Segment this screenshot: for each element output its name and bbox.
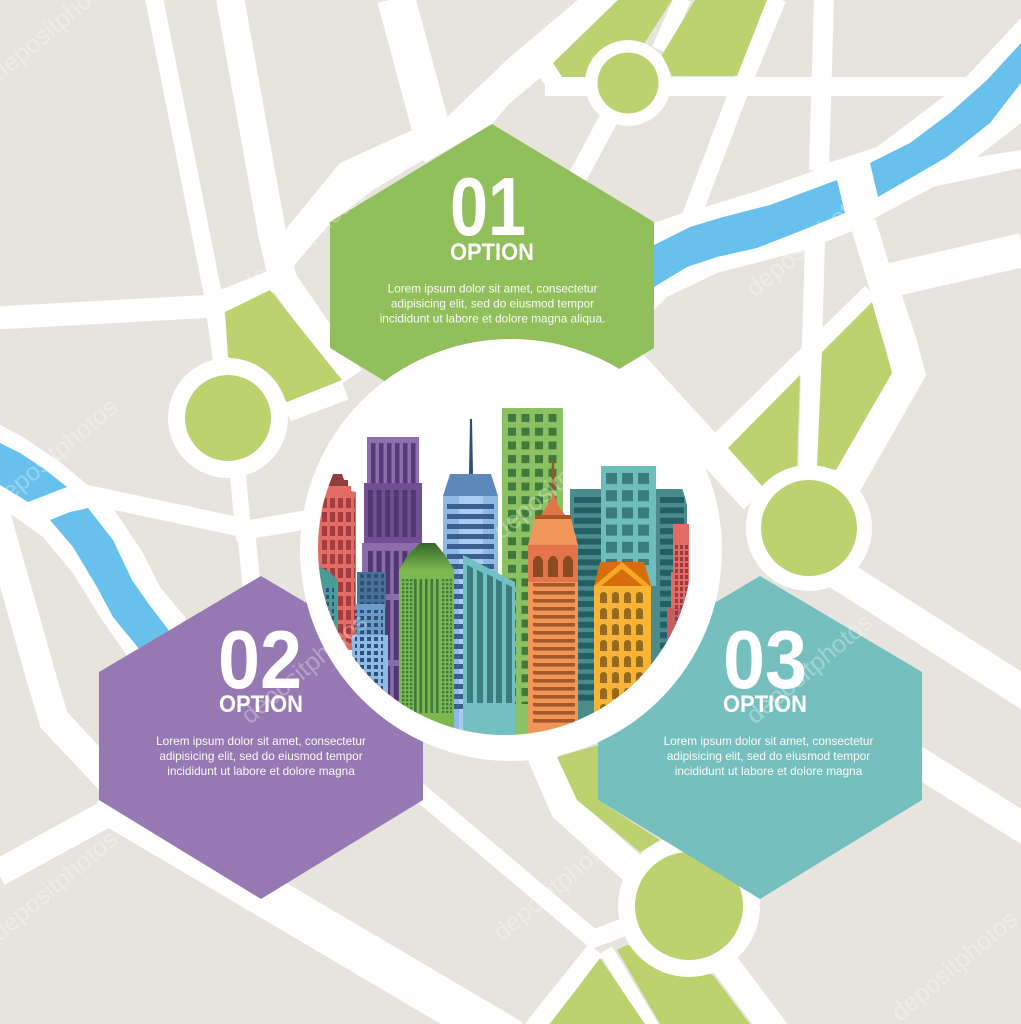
label option: OPTION — [723, 691, 807, 718]
illustration: city skyline — [318, 408, 689, 738]
building: teal group — [570, 466, 687, 729]
building: small blue — [352, 572, 388, 705]
watermarks: depositphotos — [236, 608, 373, 730]
parks — [225, 0, 892, 1024]
description: adipisicing elit, sed do eiusmod tempor — [667, 749, 870, 763]
description: adipisicing elit, sed do eiusmod tempor — [391, 296, 594, 310]
building: red left — [318, 474, 356, 650]
river banks: left — [0, 425, 185, 670]
central white circle — [300, 339, 722, 761]
description — [156, 734, 366, 778]
panel: option 03 hexagon — [598, 576, 922, 899]
roundabouts — [168, 40, 872, 977]
watermarks: depositphotos — [741, 608, 878, 730]
label option: OPTION — [219, 691, 303, 718]
river: upper right — [654, 43, 1021, 287]
building: teal small left — [318, 566, 337, 630]
map block beside river — [977, 123, 1021, 157]
panel: option 01 hexagon — [330, 124, 654, 446]
text: option 03 — [664, 613, 873, 778]
watermarks: depositphotos — [488, 423, 625, 545]
map sliver beside hexagon — [373, 160, 430, 205]
building: red right — [667, 524, 689, 648]
description: adipisicing elit, sed do eiusmod tempor — [159, 749, 363, 763]
building: teal glass front — [463, 555, 515, 738]
building: purple — [362, 437, 422, 708]
description — [380, 282, 605, 326]
description: Lorem ipsum dolor sit amet, consectetur — [156, 734, 366, 748]
number 01: 01 — [450, 160, 526, 253]
description: incididunt ut labore et dolore magna aliqua. — [380, 312, 605, 326]
text: option 01 — [380, 160, 605, 326]
watermarks: depositphotos — [488, 825, 625, 947]
text: option 02 — [156, 613, 366, 778]
number 03: 03 — [723, 613, 807, 706]
watermarks: depositphotos — [741, 181, 878, 303]
description: incididunt ut labore et dolore magna — [675, 764, 863, 778]
panel: option 02 hexagon — [99, 576, 423, 899]
building: yellow — [594, 562, 651, 712]
label option: OPTION — [450, 239, 534, 266]
river banks: upper right — [654, 18, 1021, 310]
river: left — [0, 443, 170, 650]
description — [664, 734, 873, 778]
description: Lorem ipsum dolor sit amet, consectetur — [388, 282, 597, 296]
description: Lorem ipsum dolor sit amet, consectetur — [664, 734, 873, 748]
building: blue spire tower — [443, 419, 498, 736]
number 02: 02 — [218, 613, 302, 706]
building: orange — [528, 460, 578, 738]
building: green middle — [399, 543, 454, 736]
building: tall green — [502, 408, 563, 738]
description: incididunt ut labore et dolore magna — [167, 764, 355, 778]
watermarks: depositphotos — [236, 178, 373, 300]
